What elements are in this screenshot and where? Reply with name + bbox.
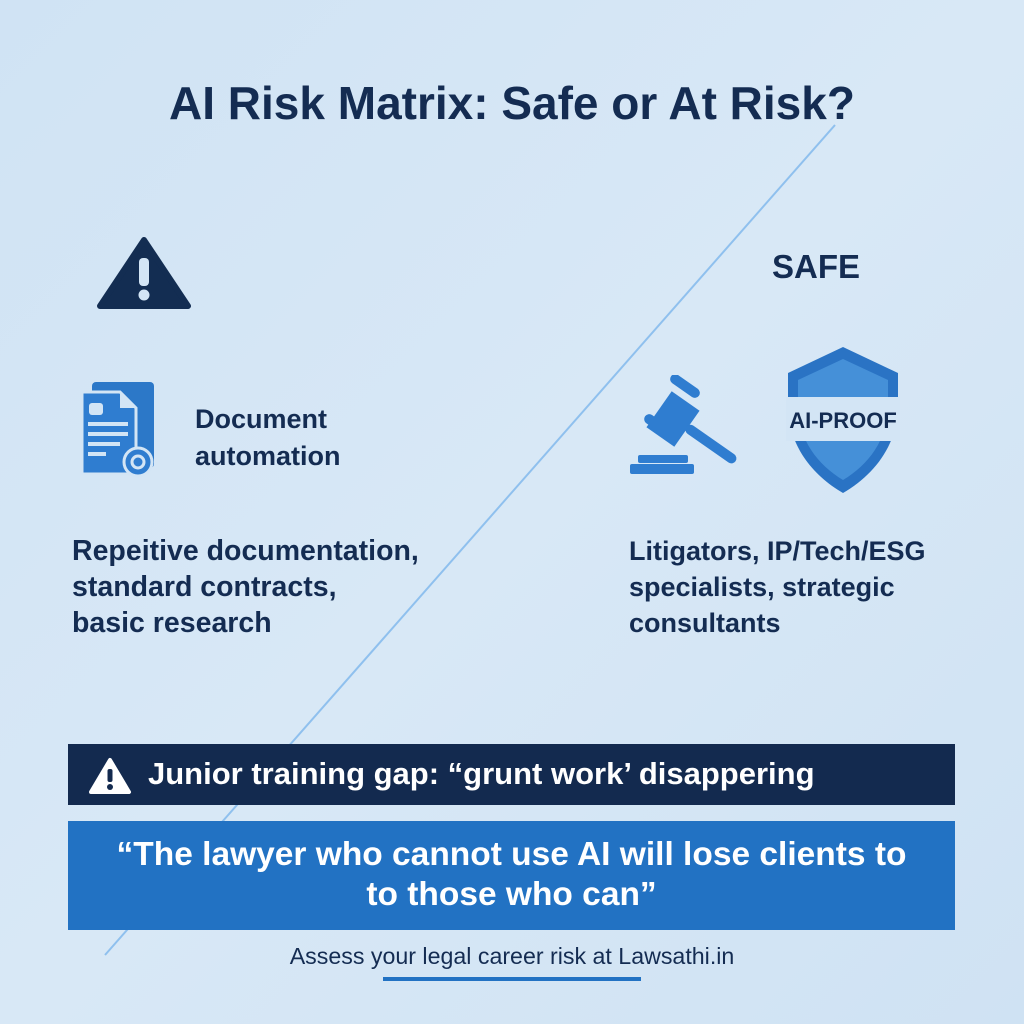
text: at risk roles: Repeitive documentation, [72, 535, 419, 567]
icon: warning [97, 237, 191, 309]
text: document automation [195, 404, 340, 471]
text: at risk roles [72, 535, 419, 639]
title: AI Risk Matrix: Safe or At Risk? [169, 77, 855, 129]
footer cta: Assess your legal career risk at Lawsathi.in [290, 943, 734, 969]
text: at risk roles: basic research [72, 607, 272, 639]
text: safe roles: consultants [629, 608, 781, 638]
text: safe roles [629, 536, 926, 638]
label: safe: SAFE [772, 248, 860, 285]
text: at risk roles: standard contracts, [72, 571, 336, 603]
text: document automation: Document [195, 404, 327, 434]
text: gap: Junior training gap: “grunt work’ disappering [148, 756, 815, 791]
quote box [68, 821, 955, 930]
text: document automation: automation [195, 441, 340, 471]
text: safe roles: specialists, strategic [629, 572, 895, 602]
quote box: “The lawyer who cannot use AI will lose clients to [117, 836, 906, 873]
banner: junior training gap [68, 744, 955, 805]
icon: shield ai-proof [788, 347, 898, 493]
icon: document [84, 382, 154, 474]
icon: gavel [630, 375, 736, 474]
icon: warning small [89, 758, 132, 794]
icon: shield ai-proof: AI-PROOF [789, 408, 897, 433]
quote box: to those who can” [366, 876, 657, 913]
text: safe roles: Litigators, IP/Tech/ESG [629, 536, 926, 566]
